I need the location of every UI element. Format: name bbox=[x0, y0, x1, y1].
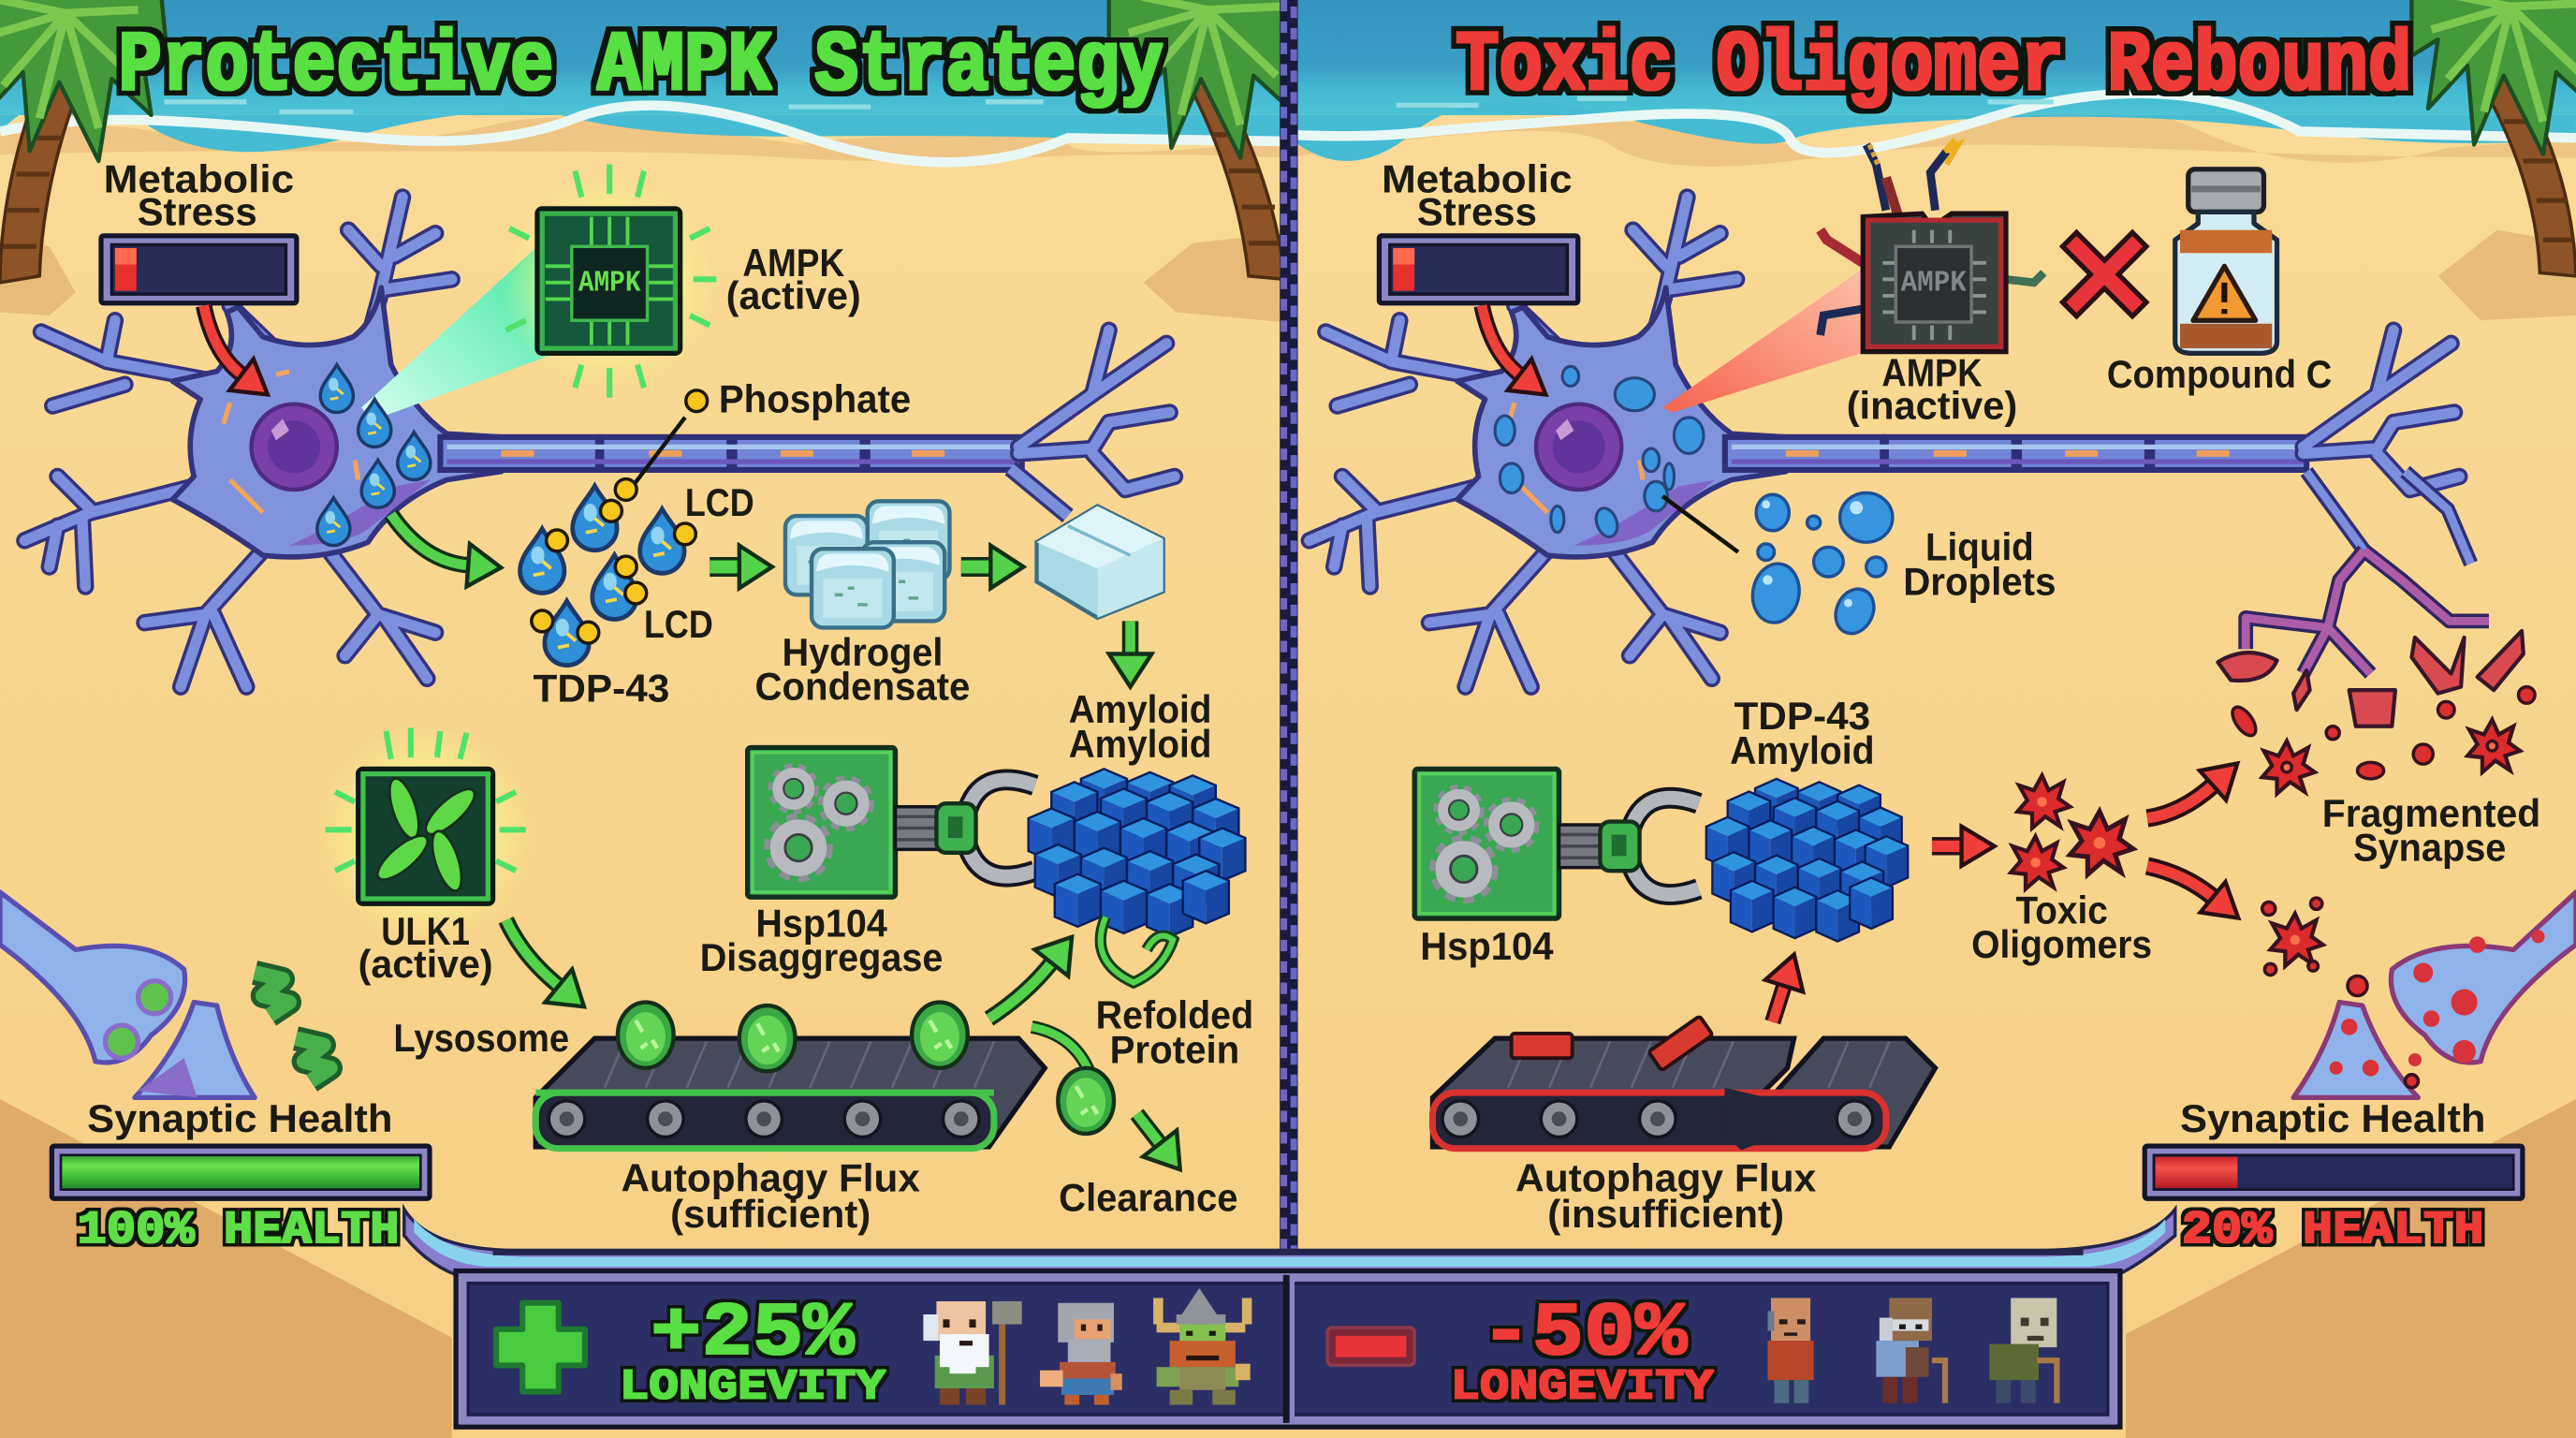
character: tired adult bbox=[1767, 1298, 1814, 1403]
label: TDP-43 amyloid: Amyloid bbox=[1730, 728, 1875, 772]
healthy synapse bbox=[0, 892, 330, 1097]
label: AMPK active: AMPK bbox=[742, 241, 845, 285]
label: toxic oligomers: Oligomers bbox=[1971, 922, 2152, 966]
label: autophagy flux insufficient: (insufficient) bbox=[1547, 1192, 1784, 1236]
label: ULK1 active bbox=[359, 909, 493, 986]
label: AMPK active bbox=[726, 241, 861, 317]
label: refolded protein bbox=[1096, 993, 1253, 1072]
arrow: conveyor up to amyloid bbox=[1773, 986, 1784, 1022]
label: clearance: Clearance bbox=[1059, 1175, 1237, 1219]
Hsp104 disaggregase machine bbox=[748, 748, 1035, 897]
amyloid cube cluster bbox=[1029, 769, 1245, 936]
liquid droplets callout bbox=[1662, 493, 1893, 639]
conveyor sufficient bbox=[535, 1003, 1045, 1149]
label: toxic oligomers: Toxic bbox=[2015, 888, 2108, 932]
AMPK beam bbox=[361, 246, 552, 420]
AMPK active chip bbox=[501, 165, 718, 398]
arrow: conveyor to amyloid bbox=[989, 962, 1051, 1019]
label: hydrogel condensate: Condensate bbox=[754, 665, 970, 709]
bottom shelf rail bbox=[404, 1210, 2175, 1278]
label: liquid droplets: Droplets bbox=[1903, 559, 2056, 603]
panel: toxic rebound bbox=[1310, 139, 2576, 1256]
palm tree: top left bbox=[0, 0, 168, 283]
red X bbox=[2076, 246, 2132, 302]
label: refolded protein: Protein bbox=[1110, 1028, 1239, 1072]
character: orc viking bbox=[1153, 1288, 1251, 1405]
icon: minus bbox=[1327, 1328, 1414, 1365]
label: LCD top: LCD bbox=[685, 480, 754, 524]
palm tree shadows bbox=[0, 230, 2576, 322]
battery low bbox=[1377, 233, 1580, 305]
health bar low bbox=[2143, 1143, 2525, 1201]
arrow: amyloid to oligomers bbox=[1932, 841, 1962, 851]
label: fragmented synapse bbox=[2322, 791, 2540, 870]
AMPK inactive chip: AMPK bbox=[1901, 268, 1967, 301]
ice cube bbox=[1036, 506, 1164, 618]
battery low bbox=[98, 233, 299, 305]
label: hydrogel condensate: Hydrogel bbox=[782, 630, 943, 674]
20% health text: 20% HEALTH bbox=[2182, 1204, 2484, 1256]
arrow: oligomers to fragmented synapse bbox=[2147, 785, 2213, 818]
label: amyloid bbox=[1069, 687, 1211, 766]
label: ULK1 active: (active) bbox=[359, 942, 493, 986]
conveyor broken bbox=[1432, 1016, 1935, 1151]
droplets scattered in soma bbox=[1495, 366, 1704, 540]
label: AMPK inactive: AMPK bbox=[1881, 350, 1983, 394]
centre divider bbox=[1280, 0, 1298, 1269]
hydrogel condensate cubes bbox=[785, 501, 949, 627]
label: fragmented synapse: Synapse bbox=[2353, 826, 2506, 870]
neuron healthy bbox=[24, 198, 1175, 687]
arrow: stress to neuron bbox=[204, 305, 242, 374]
label: hydrogel condensate bbox=[754, 630, 970, 709]
label: lysosome: Lysosome bbox=[393, 1016, 569, 1060]
label: fragmented synapse: Fragmented bbox=[2322, 791, 2540, 835]
splat near synapse bbox=[2262, 898, 2367, 996]
label: liquid droplets bbox=[1903, 524, 2056, 603]
character: pale elder bbox=[1989, 1298, 2056, 1403]
arrow: stress to neuron bbox=[1482, 305, 1519, 374]
palm tree: top right bbox=[2411, 0, 2576, 276]
longevity right: LONGEVITY bbox=[1451, 1363, 1714, 1412]
label: autophagy flux sufficient: (sufficient) bbox=[670, 1192, 871, 1236]
label: metabolic stress bbox=[1382, 156, 1573, 233]
arrow: oligomers to damaged synapse bbox=[2147, 866, 2213, 897]
label: autophagy flux insufficient: Autophagy Flux bbox=[1515, 1155, 1817, 1199]
label: Compound C: Compound C bbox=[2107, 352, 2332, 396]
arrow: conveyor to clearance lysosome bbox=[1032, 1027, 1090, 1077]
droplets in soma bbox=[317, 365, 431, 546]
fragments bbox=[2228, 687, 2535, 794]
label: Hsp104 disaggregase bbox=[700, 901, 943, 979]
health bar full bbox=[50, 1143, 432, 1201]
label: TDP-43: TDP-43 bbox=[534, 666, 669, 710]
label: metabolic stress bbox=[104, 156, 294, 233]
label: metabolic stress: Stress bbox=[138, 189, 257, 233]
toxic oligomers bbox=[2011, 775, 2133, 888]
label: TDP-43 amyloid: TDP-43 bbox=[1734, 694, 1870, 738]
label: synaptic health right: Synaptic Health bbox=[2180, 1096, 2485, 1140]
label: ULK1 active: ULK1 bbox=[381, 909, 470, 953]
label: TDP-43 amyloid bbox=[1730, 694, 1875, 772]
character: grey dwarf bbox=[1040, 1303, 1122, 1405]
label: Hsp104: Hsp104 bbox=[1420, 924, 1554, 968]
character: frail elder bbox=[1876, 1298, 1945, 1403]
label: AMPK active: (active) bbox=[726, 273, 861, 317]
arrow: to solid cube bbox=[961, 561, 990, 572]
-50%: -50% bbox=[1480, 1292, 1688, 1377]
label: Hsp104 disaggregase: Disaggregase bbox=[700, 935, 943, 979]
label: amyloid: Amyloid bbox=[1069, 722, 1211, 766]
arrow: ULK1 to conveyor bbox=[506, 920, 559, 986]
100% health text: 100% HEALTH bbox=[78, 1204, 400, 1256]
bottom panel: longevity bbox=[453, 1269, 2123, 1430]
label: toxic oligomers bbox=[1971, 888, 2152, 966]
phosphate callout: Phosphate bbox=[719, 377, 911, 421]
phosphate callout bbox=[633, 377, 911, 486]
arrow: soma to TDP-43 bbox=[391, 514, 468, 565]
neuron damaged bbox=[1310, 198, 2459, 687]
arrow: to clearance bbox=[1137, 1114, 1160, 1143]
label: autophagy flux sufficient bbox=[621, 1155, 920, 1236]
character: old sage bbox=[923, 1301, 1022, 1405]
label: refolded protein: Refolded bbox=[1096, 993, 1253, 1037]
label: amyloid: Amyloid bbox=[1069, 687, 1211, 731]
AMPK active chip: AMPK bbox=[578, 268, 641, 301]
+25%: +25% bbox=[651, 1292, 855, 1377]
label: AMPK inactive: (inactive) bbox=[1847, 384, 2017, 428]
icon: plus bbox=[496, 1303, 585, 1392]
label: AMPK inactive bbox=[1847, 350, 2017, 428]
phosphorylated TDP-43 cluster bbox=[520, 479, 695, 666]
label: LCD bottom: LCD bbox=[644, 602, 713, 646]
degenerating axon branch bbox=[2217, 472, 2524, 726]
amyloid cube cluster bbox=[1706, 779, 1908, 942]
palm tree: centre left bbox=[1106, 0, 1281, 281]
label: metabolic stress: Stress bbox=[1417, 189, 1537, 233]
label: Hsp104 disaggregase: Hsp104 bbox=[755, 901, 887, 945]
label: metabolic stress: Metabolic bbox=[1382, 156, 1573, 200]
refolded protein strand bbox=[1101, 917, 1173, 983]
title: Protective AMPK Strategy: Protective AMPK Strategy bbox=[118, 19, 1164, 115]
clearance lysosome bbox=[1058, 1068, 1114, 1134]
label: autophagy flux sufficient: Autophagy Flux bbox=[621, 1155, 920, 1199]
beam inactive bbox=[1662, 266, 1866, 413]
Hsp104 machine bbox=[1414, 769, 1699, 918]
label: autophagy flux insufficient bbox=[1515, 1155, 1817, 1236]
title: Toxic Oligomer Rebound: Toxic Oligomer Rebound bbox=[1456, 19, 2411, 115]
Compound C vial bbox=[2175, 169, 2277, 353]
label: liquid droplets: Liquid bbox=[1925, 524, 2034, 568]
label: synaptic health left: Synaptic Health bbox=[87, 1096, 393, 1140]
AMPK inactive chip bbox=[1821, 139, 2043, 352]
panel: protective strategy bbox=[0, 156, 1253, 1256]
damaged synapse bbox=[2293, 892, 2576, 1097]
label: metabolic stress: Metabolic bbox=[104, 156, 294, 200]
ULK1 active chip bbox=[317, 726, 534, 943]
longevity left: LONGEVITY bbox=[620, 1363, 886, 1412]
arrow: to hydrogel bbox=[710, 561, 739, 572]
arrow: cube to amyloid bbox=[1126, 621, 1135, 654]
